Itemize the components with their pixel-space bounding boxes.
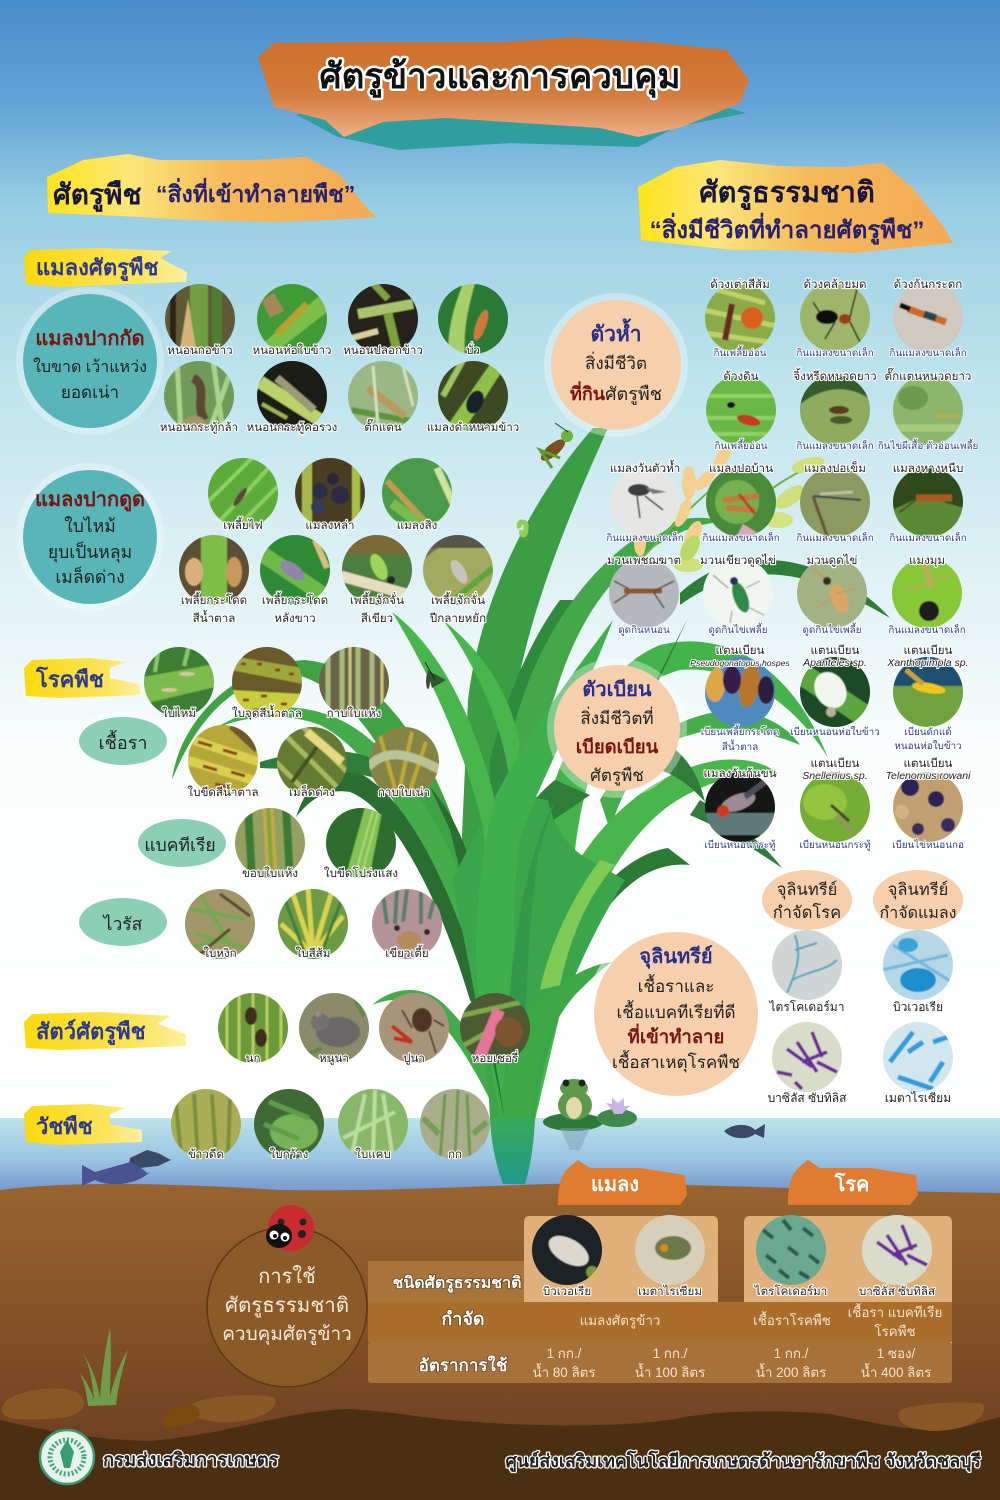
photo: Bacillus subtilis: บาซิลัส ซับทิลิส bbox=[768, 1091, 847, 1105]
photo: sheath blight bbox=[318, 646, 390, 720]
panel: sucking insects: ยุบเป็นหลุม bbox=[48, 541, 132, 563]
tag: disease bbox=[788, 1160, 918, 1205]
heading: natural enemies: “สิ่งมีชีวิตที่ทำลายศัตรูพืช” bbox=[650, 212, 924, 245]
panel: chewing insects: แมลงปากกัด bbox=[35, 328, 145, 350]
tag: insect pests bbox=[24, 248, 187, 287]
photo: green leafhopper: สีเขียว bbox=[361, 612, 393, 625]
panel: biological control circle: ควบคุมศัตรูข้าว bbox=[222, 1324, 352, 1346]
photo: predatory fly: กินแมลงขนาดเล็ก bbox=[606, 531, 684, 544]
photo: Snellenius: Snellenius sp. bbox=[802, 770, 868, 782]
row: rate text: น้ำ 200 ลิตร bbox=[756, 1363, 826, 1380]
photo: golden apple snail: หอยเชอรี่ bbox=[472, 1050, 518, 1065]
photo: case worm: หนอนปลอกข้าว bbox=[343, 344, 423, 357]
photo: Telenomus rowani: แตนเบียน bbox=[904, 757, 953, 770]
photo: bacterial leaf streak: ใบขีดโปร่งแสง bbox=[324, 866, 398, 880]
icon: frog on lily pad bbox=[543, 1079, 637, 1150]
panel: chewing insects: ใบขาด เว้าแหว่ง bbox=[33, 357, 147, 376]
photo: bacterial blight bbox=[234, 807, 306, 880]
row labels: ชนิดศัตรูธรรมชาติ bbox=[392, 1274, 522, 1294]
icon: caterpillar bbox=[519, 522, 526, 535]
photo: Apanteles: Apanteles sp. bbox=[802, 657, 867, 669]
photo: Apanteles: เบียนหนอนห่อใบข้าว bbox=[790, 726, 880, 738]
photo: sheath rot: กาบใบเน่า bbox=[378, 785, 430, 799]
photo: white-backed planthopper: หลังขาว bbox=[274, 612, 316, 625]
icon: grass bbox=[79, 1328, 128, 1406]
photo: Pseudogonatopus hospes: สีน้ำตาล bbox=[722, 739, 758, 753]
icon: mosquito bbox=[425, 662, 446, 689]
ground bbox=[0, 1183, 1000, 1500]
photo: Trichoderma culture bbox=[754, 1214, 827, 1298]
row: rate text: น้ำ 400 ลิตร bbox=[861, 1363, 931, 1380]
photo: broadleaf weeds: ใบกว้าง bbox=[270, 1147, 308, 1161]
photo: long-horned cricket bbox=[793, 367, 877, 452]
tag: insect bbox=[558, 1160, 687, 1205]
photo: common cutworm: หนอนกระทู้กล้า bbox=[160, 421, 238, 435]
bubble: microorganisms: ที่เข้าทำลาย bbox=[628, 1023, 724, 1047]
photo: Pseudogonatopus hospes: เบียนเพลี้ยกระโดด bbox=[701, 724, 779, 738]
bubble: microorganisms bbox=[586, 924, 766, 1104]
oval: insect microbes bbox=[868, 865, 968, 935]
panel: biological control circle: การใช้ bbox=[258, 1265, 316, 1288]
row labels: อัตราการใช้ bbox=[419, 1355, 508, 1375]
photo: orange leaf bbox=[277, 888, 349, 960]
photo: narrow brown spot: ใบขีดสีน้ำตาล bbox=[187, 783, 259, 799]
photo: ant-like beetle: ด้วงคล้ายมด bbox=[803, 278, 867, 291]
photo: zigzag leafhopper: ปีกลายหยัก bbox=[429, 612, 486, 625]
photo: Pseudogonatopus hospes: แตนเบียน bbox=[716, 644, 765, 657]
oval: bacteria bbox=[132, 813, 232, 873]
photo: ragged stunt bbox=[184, 888, 256, 960]
photo: thrips bbox=[207, 457, 279, 532]
bubble: parasitoids: เบียดเบียน bbox=[576, 736, 659, 757]
row: controls text: เชื้อรา แบคทีเรีย bbox=[848, 1303, 942, 1320]
heading: pests: ศัตรูพืช bbox=[53, 179, 141, 212]
photo: rice bug: แมลงสิง bbox=[397, 519, 437, 532]
bubble: predators: ที่กินศัตรูพืช bbox=[570, 381, 662, 405]
photo: rice black bug bbox=[427, 360, 519, 434]
photo: Beauveria on insect bbox=[531, 1214, 603, 1298]
photo: brown spot: ใบจุดสีน้ำตาล bbox=[232, 704, 302, 720]
photo: leaf folder bbox=[252, 283, 332, 357]
logo: department of agricultural extension bbox=[40, 1430, 94, 1484]
photo: white-backed planthopper bbox=[259, 534, 331, 625]
bubble: predators: ตัวห้ำ bbox=[590, 318, 642, 346]
photo: ant-like beetle bbox=[796, 278, 874, 359]
photo: Metarhizium bbox=[882, 1021, 954, 1105]
photo: Bacillus subtilis bbox=[768, 1021, 847, 1105]
photo: blast: ใบไหม้ bbox=[162, 706, 196, 720]
photo: long-horned cricket: จิ้งหรีดหนวดยาว bbox=[793, 367, 877, 383]
photo: stink bug: บั่ว bbox=[466, 342, 480, 357]
bubble: parasitoids: ศัตรูพืช bbox=[590, 766, 644, 786]
tag: animal pests bbox=[24, 1012, 186, 1050]
photo: spider: กินแมลงขนาดเล็ก bbox=[888, 623, 966, 636]
row: rate text: 1 กก./ bbox=[547, 1346, 582, 1361]
photo: water strider bbox=[607, 554, 681, 636]
row labels bbox=[392, 1274, 522, 1375]
photo: dragonfly bbox=[702, 462, 780, 544]
row: rate text: 1 กก./ bbox=[653, 1346, 688, 1361]
photo: long-horned grasshopper bbox=[878, 367, 978, 452]
row: controls text: โรคพืช bbox=[874, 1324, 916, 1339]
photo: long-horned cricket: กินแมลงขนาดเล็ก bbox=[796, 439, 874, 452]
photo: stem borer bbox=[164, 283, 236, 357]
panel: biological control circle bbox=[207, 1227, 367, 1387]
table: natural enemy usage bbox=[368, 1214, 952, 1383]
photo: Telenomus rowani: เบียนไข่หนอนกอ bbox=[892, 839, 964, 851]
photo: weedy rice: ข้าวดีด bbox=[188, 1148, 224, 1161]
bubble: parasitoids bbox=[547, 658, 687, 798]
photo: Tachinid fly: เบียนหนอนกระทู้ bbox=[704, 839, 776, 851]
photo: Beauveria bbox=[882, 929, 954, 1014]
photo: earwig: กินแมลงขนาดเล็ก bbox=[889, 531, 967, 544]
photo: Metarhizium on insect: เมตาไรเซียม bbox=[638, 1284, 702, 1298]
photo: Telenomus rowani bbox=[886, 757, 971, 851]
main title bbox=[258, 37, 749, 150]
heading: pests: “สิ่งที่เข้าทำลายพืช” bbox=[156, 177, 355, 207]
photo: brown planthopper bbox=[178, 534, 250, 625]
photo: Pseudogonatopus hospes: Pseudogonatopus hospes bbox=[690, 658, 790, 668]
photo: Beauveria: บิวเวอเรีย bbox=[893, 1000, 943, 1014]
bubble: microorganisms: เชื้อแบคทีเรียที่ดี bbox=[616, 1000, 736, 1022]
row: rate text: น้ำ 80 ลิตร bbox=[532, 1363, 596, 1380]
photo: broadleaf weeds bbox=[253, 1088, 325, 1161]
oval: bacteria: แบคทีเรีย bbox=[144, 835, 216, 855]
photo: ear-cutting caterpillar bbox=[247, 360, 337, 435]
photo: black bugs bbox=[294, 457, 366, 532]
photo: Snellenius: เบียนหนอนกระทู้ bbox=[799, 839, 871, 851]
photo: Xanthopimpla bbox=[886, 644, 969, 752]
photo: blast bbox=[143, 646, 215, 720]
row: rate text: 1 กก./ bbox=[774, 1346, 809, 1361]
row labels: กำจัด bbox=[441, 1309, 485, 1329]
rocks bbox=[2, 1388, 984, 1431]
photo: water strider: มวนเพชฌฆาต bbox=[607, 554, 681, 567]
photo: brown planthopper: เพลี้ยกระโดด bbox=[181, 591, 247, 607]
row: rate text: น้ำ 100 ลิตร bbox=[635, 1363, 705, 1380]
photo: Beauveria on insect: บิวเวอเรีย bbox=[543, 1285, 591, 1298]
photo: sheath rot bbox=[368, 726, 440, 799]
photo: mirid bug: ดูดกินไข่เพลี้ย bbox=[708, 622, 768, 636]
photo: sedge: กก bbox=[448, 1148, 462, 1161]
panel: biological control circle: ศัตรูธรรมชาติ bbox=[225, 1294, 349, 1318]
photo: water strider: ดูดกินหนอน bbox=[618, 625, 670, 636]
oval: disease microbes: กำจัดโรค bbox=[773, 903, 841, 922]
photo: sheath blight: กาบใบแห้ง bbox=[327, 706, 381, 720]
dark soil bbox=[0, 1409, 1000, 1500]
footer right text: ศูนย์ส่งเสริมเทคโนโลยีการเกษตรด้านอารักขาพืช จังหวัดชลบุรี bbox=[505, 1450, 981, 1473]
photo: Tachinid fly bbox=[703, 767, 777, 851]
bubble: predators bbox=[544, 293, 688, 437]
photo: grassy stunt bbox=[371, 888, 443, 960]
photo: Xanthopimpla: เบียนดักแด้ bbox=[904, 726, 952, 738]
photo: weedy rice bbox=[170, 1088, 242, 1161]
tag: insect: แมลง bbox=[591, 1174, 639, 1196]
photo: field crab bbox=[378, 992, 450, 1066]
photo: damselfly: แมลงปอเข็ม bbox=[804, 460, 866, 475]
tag: weeds: วัชพืช bbox=[36, 1114, 93, 1139]
oval: fungi: เชื้อรา bbox=[99, 730, 147, 753]
photo: bird: นก bbox=[246, 1052, 260, 1065]
photo: dirty panicle: เมล็ดด่าง bbox=[289, 784, 335, 799]
photo: dragonfly: แมลงปอบ้าน bbox=[709, 462, 773, 475]
photo: damselfly bbox=[796, 460, 874, 544]
bubble: microorganisms: จุลินทรีย์ bbox=[639, 945, 713, 969]
icon: fish left bbox=[82, 1150, 171, 1186]
icon: ladybug bbox=[266, 1205, 314, 1251]
background sky bbox=[0, 0, 1000, 1130]
photo: ant-like beetle: กินแมลงขนาดเล็ก bbox=[796, 346, 874, 359]
photo: ground beetle: กินเพลี้ยอ่อน bbox=[714, 438, 768, 452]
heading: natural enemies bbox=[638, 160, 953, 253]
photo: green leafhopper: เพลี้ยจักจั่น bbox=[350, 591, 404, 607]
photo: ladybird beetle bbox=[704, 278, 776, 359]
oval: virus: ไวรัส bbox=[102, 914, 143, 934]
photo: egg-sucking bug: ดูดกินไข่เพลี้ย bbox=[802, 622, 862, 636]
heading: pests bbox=[47, 154, 376, 222]
oval: virus bbox=[73, 892, 173, 952]
photo: damselfly: กินแมลงขนาดเล็ก bbox=[796, 531, 874, 544]
panel: sucking insects: แมลงปากดูด bbox=[35, 489, 145, 513]
photo: spider bbox=[888, 554, 966, 636]
photo: ear-cutting caterpillar: หนอนกระทู้คอรวง bbox=[247, 421, 337, 435]
photo: dirty panicle bbox=[276, 726, 348, 799]
photo: rove beetle: กินแมลงขนาดเล็ก bbox=[889, 346, 967, 359]
row: controls text bbox=[580, 1303, 942, 1339]
photo: rice black bug: แมลงดำหนามข้าว bbox=[427, 421, 519, 434]
rice plant illustration bbox=[172, 428, 890, 1184]
row: controls text: เชื้อราโรคพืช bbox=[753, 1311, 831, 1328]
photo: rove beetle bbox=[889, 278, 967, 359]
photo: ladybird beetle: กินเพลี้ยอ่อน bbox=[713, 345, 767, 359]
photo: bacterial leaf streak bbox=[324, 807, 398, 880]
photo: green leafhopper bbox=[341, 534, 413, 625]
photo: egg-sucking bug: มวนดูดไข่ bbox=[807, 553, 857, 568]
photo: grassy stunt: เขียวเตี้ย bbox=[385, 944, 429, 960]
photo: Pseudogonatopus hospes bbox=[690, 644, 790, 753]
photo: ground beetle bbox=[705, 370, 777, 452]
photo: Trichoderma: ไตรโคเดอร์มา bbox=[769, 1000, 844, 1014]
panel: sucking insects bbox=[16, 463, 164, 611]
photo: grasshopper bbox=[347, 360, 419, 434]
photo: grasshopper: ตั๊กแตน bbox=[364, 418, 402, 434]
photo: brown spot bbox=[231, 646, 303, 720]
photo: narrow brown spot bbox=[187, 724, 259, 799]
photo: Trichoderma bbox=[769, 929, 844, 1014]
bubble: parasitoids: ตัวเบียน bbox=[582, 678, 652, 701]
row: controls text: แมลงศัตรูข้าว bbox=[580, 1313, 660, 1329]
photo: long-horned grasshopper: กินไข่ผีเสื้อ ตัวอ่อนเพลี้ย bbox=[878, 438, 978, 452]
photo: stem borer: หนอนกอข้าว bbox=[167, 344, 233, 357]
photo: Xanthopimpla: หนอนห่อใบข้าว bbox=[894, 740, 962, 752]
photo: sedge bbox=[419, 1088, 491, 1161]
oval: fungi bbox=[73, 711, 173, 771]
photo: Xanthopimpla: Xanthopimpla sp. bbox=[886, 657, 969, 669]
photo: white-backed planthopper: เพลี้ยกระโดด bbox=[262, 591, 328, 607]
photo: Trichoderma culture: ไตรโคเดอร์มา bbox=[754, 1284, 827, 1298]
photo: predatory fly bbox=[606, 459, 684, 544]
photo: Apanteles: แตนเบียน bbox=[811, 644, 860, 657]
photo: rove beetle: ด้วงก้นกระดก bbox=[894, 278, 962, 291]
photo: thrips: เพลี้ยไฟ bbox=[223, 516, 263, 532]
photo: narrowleaf weeds: ใบแคบ bbox=[355, 1147, 391, 1161]
bubble: parasitoids: สิ่งมีชีวิตที่ bbox=[580, 706, 654, 728]
photo: Snellenius: แตนเบียน bbox=[811, 757, 860, 770]
icon: fish right bbox=[724, 1124, 765, 1138]
photo: bird bbox=[217, 992, 289, 1065]
photo: long-horned grasshopper: ตั๊กแตนหนวดยาว bbox=[885, 367, 971, 383]
row: rate text: 1 ซอง/ bbox=[877, 1346, 916, 1361]
bubble: microorganisms: เชื้อราและ bbox=[638, 974, 714, 996]
tag: weeds bbox=[24, 1104, 142, 1145]
photo: leaf folder: หนอนห่อใบข้าว bbox=[252, 343, 332, 357]
photo: Metarhizium on insect bbox=[634, 1214, 706, 1298]
photo: egg-sucking bug bbox=[796, 553, 868, 636]
photo: rat: หนูนา bbox=[319, 1052, 349, 1066]
photo: ground beetle: ด้วงดิน bbox=[723, 370, 759, 383]
photo: Bacillus culture bbox=[859, 1214, 935, 1298]
water bbox=[0, 1118, 1000, 1200]
photo: spider: แมงมุม bbox=[909, 554, 945, 567]
tag: insect pests: แมลงศัตรูพืช bbox=[36, 255, 158, 282]
photo: Tachinid fly: แมลงวันก้นขน bbox=[703, 767, 777, 780]
tag: diseases bbox=[24, 658, 140, 698]
photo: ragged stunt: ใบหงิก bbox=[203, 946, 237, 960]
oval: disease microbes: จุลินทรีย์ bbox=[777, 880, 837, 900]
photo: bacterial blight: ขอบใบแห้ง bbox=[242, 866, 298, 880]
photo: Apanteles bbox=[790, 644, 880, 738]
photo: rice bug bbox=[381, 457, 453, 532]
photo: brown planthopper: สีน้ำตาล bbox=[193, 609, 235, 625]
photo: orange leaf: ใบสีส้ม bbox=[296, 946, 330, 960]
photo: earwig: แมลงหางหนีบ bbox=[893, 462, 963, 475]
rice grains panicle bbox=[634, 441, 826, 572]
photo: field crab: ปูนา bbox=[403, 1052, 425, 1066]
photo: mirid bug: มวนเขียวดูดไข่ bbox=[700, 553, 776, 568]
tag: diseases: โรคพืช bbox=[35, 666, 104, 692]
title text: ศัตรูข้าวและการควบคุม bbox=[319, 57, 681, 98]
panel: sucking insects: เมล็ดด่าง bbox=[55, 566, 125, 587]
photo: earwig bbox=[889, 462, 967, 544]
tag: disease: โรค bbox=[834, 1172, 869, 1196]
tag: animal pests: สัตว์ศัตรูพืช bbox=[36, 1019, 146, 1046]
photo: Snellenius bbox=[799, 757, 871, 851]
photo: narrowleaf weeds bbox=[337, 1088, 409, 1161]
photo: rat bbox=[298, 992, 370, 1066]
photo: Xanthopimpla: แตนเบียน bbox=[904, 644, 953, 657]
row: rate text bbox=[532, 1346, 931, 1380]
icon: grasshopper bbox=[538, 423, 573, 468]
footer left text: กรมส่งเสริมการเกษตร bbox=[103, 1449, 279, 1470]
photo: ladybird beetle: ด้วงเต่าสีส้ม bbox=[710, 278, 770, 291]
heading: natural enemies: ศัตรูธรรมชาติ bbox=[699, 177, 875, 210]
oval: insect microbes: กำจัดแมลง bbox=[880, 905, 956, 922]
bubble: microorganisms: เชื้อสาเหตุโรคพืช bbox=[612, 1050, 740, 1073]
oval: insect microbes: จุลินทรีย์ bbox=[888, 880, 948, 900]
photo: mirid bug bbox=[700, 553, 776, 636]
photo: golden apple snail bbox=[459, 992, 531, 1065]
oval: disease microbes bbox=[757, 865, 857, 935]
panel: chewing insects: ยอดเน่า bbox=[61, 383, 119, 402]
panel: sucking insects: ใบไหม้ bbox=[64, 516, 116, 536]
photo: black bugs: แมลงหล่า bbox=[305, 519, 355, 532]
bubble: predators: สิ่งมีชีวิต bbox=[585, 351, 647, 373]
panel: chewing insects bbox=[16, 287, 164, 435]
photo: case worm bbox=[343, 283, 423, 357]
photo: Metarhizium: เมตาไรเซียม bbox=[885, 1091, 951, 1105]
photo: dragonfly: กินแมลงขนาดเล็ก bbox=[702, 531, 780, 544]
photo: predatory fly: แมลงวันตัวห้ำ bbox=[610, 459, 680, 475]
photo: zigzag leafhopper: เพลี้ยจักจั่น bbox=[431, 591, 485, 607]
photo: Telenomus rowani: Telenomus rowani bbox=[886, 770, 971, 782]
photo: stink bug bbox=[437, 283, 509, 357]
photo: Bacillus culture: บาซิลัส ซับทิลิส bbox=[859, 1285, 935, 1298]
photo: common cutworm bbox=[160, 360, 238, 435]
photo: zigzag leafhopper bbox=[422, 534, 494, 625]
